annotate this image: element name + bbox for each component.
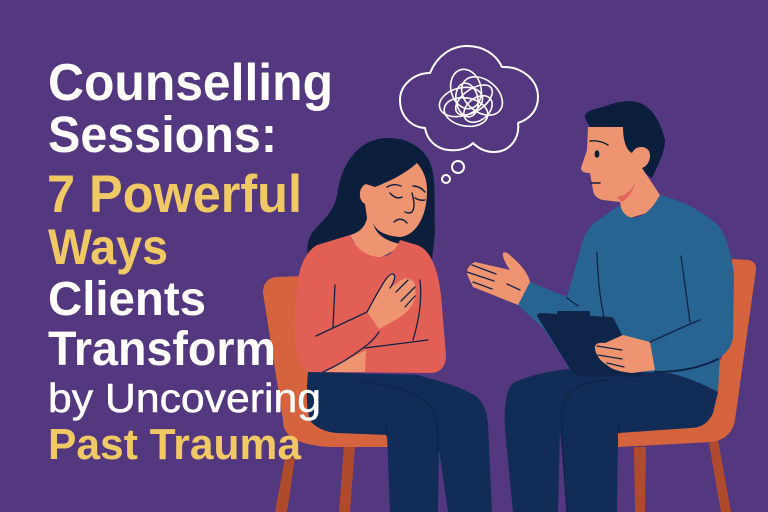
chair back and seat — [263, 276, 388, 447]
facial features — [387, 185, 425, 223]
pants — [307, 372, 492, 512]
bubble dots — [442, 161, 464, 183]
man's chair — [618, 259, 756, 512]
title line: Clients: Clients — [48, 273, 206, 326]
hair — [585, 101, 665, 178]
woman's chair — [263, 276, 388, 512]
title line: Transform: Transform — [48, 323, 276, 376]
title line: by Uncovering: by Uncovering — [48, 375, 321, 421]
title — [47, 54, 333, 469]
fold and finger lines — [467, 252, 700, 512]
head and neck — [581, 127, 660, 218]
title line: Counselling: Counselling — [48, 54, 333, 112]
title line: Ways: Ways — [48, 219, 168, 275]
hand on chest — [367, 274, 416, 329]
chair legs — [634, 440, 731, 512]
hand on clipboard — [595, 335, 655, 373]
gesturing hand — [467, 252, 530, 305]
chair back and seat — [618, 259, 756, 447]
exposed midriff — [323, 350, 366, 372]
pants — [505, 369, 718, 512]
title line: Sessions: Sessions: — [48, 106, 277, 163]
neck shadow — [617, 182, 635, 202]
man — [467, 101, 734, 512]
thought bubble — [400, 46, 538, 183]
title line: 7 Powerful: 7 Powerful — [47, 165, 302, 224]
face and neck — [350, 163, 427, 258]
tangled scribble — [436, 66, 510, 130]
sweater and pants fold lines — [316, 274, 438, 450]
hair — [307, 138, 435, 260]
sweater — [295, 235, 446, 373]
jaw shadow — [373, 223, 400, 244]
facial features — [590, 141, 608, 183]
sweater and extended arm — [518, 195, 734, 392]
eye — [595, 150, 599, 158]
title line: Past Trauma: Past Trauma — [48, 420, 302, 469]
chair legs — [275, 445, 355, 512]
sweater hem shadow — [655, 359, 718, 372]
clipboard — [537, 311, 643, 377]
woman — [295, 138, 492, 512]
cloud outline — [400, 46, 538, 152]
